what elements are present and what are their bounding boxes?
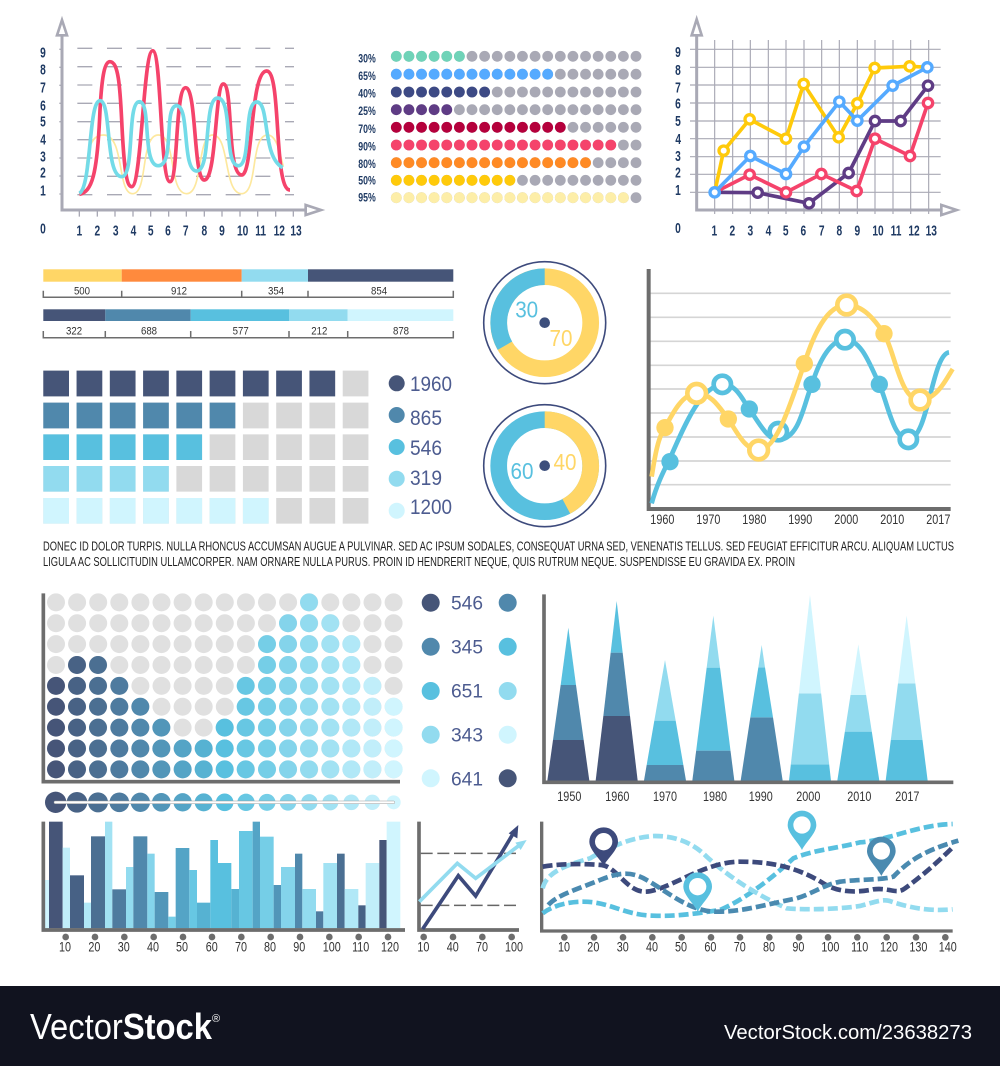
x axis labels: 70: [235, 939, 247, 955]
chart: stacked bar two: 878: [393, 325, 409, 338]
icon: cyan pin high: [788, 811, 816, 850]
chart: percentage dot rows: [358, 53, 636, 205]
legend: waffle grid: 865: [410, 407, 442, 430]
x axis labels: 60: [206, 939, 218, 955]
y axis labels: 8: [675, 61, 681, 79]
text block: paragraph: [43, 539, 954, 569]
y axis labels: [40, 43, 47, 237]
y axis labels: 4: [675, 130, 682, 148]
x axis labels: 3: [113, 221, 119, 239]
y axis labels: 5: [675, 112, 681, 130]
footer reference: VectorStock.com/23638273: [724, 1022, 972, 1044]
x axis labels: 6: [165, 221, 171, 239]
year labels: [557, 789, 920, 804]
blue series: [652, 331, 949, 503]
triangle 1960: [596, 601, 638, 781]
triangle 2000: [789, 595, 831, 781]
x axis labels: 4: [766, 221, 772, 239]
y axis labels: 1: [40, 181, 46, 199]
chart: trend arrows: [417, 822, 527, 955]
y axis labels: 0: [40, 219, 46, 237]
chart: stacked bar two: [43, 309, 453, 338]
chart: wave line chart: [40, 20, 321, 239]
percentage labels: 50%: [358, 175, 376, 188]
chart: stacked bar one: [43, 269, 453, 298]
triangle 1980: [692, 616, 734, 781]
x axis labels: 120: [880, 939, 898, 955]
donut chart: 30 / 70: 30: [515, 296, 538, 322]
dot rows: [396, 56, 636, 198]
legend: dot matrix: 641: [451, 770, 483, 790]
y axis labels: 7: [675, 78, 681, 96]
x axis labels: 80: [264, 939, 276, 955]
chart: stacked bar two: 212: [311, 325, 327, 338]
icon: teal pin: [867, 837, 896, 876]
x axis labels: 90: [792, 939, 805, 955]
percentage labels: 65%: [358, 71, 376, 83]
triangle 1990: [741, 645, 783, 781]
percentage labels: 80%: [358, 159, 376, 171]
x axis labels: 100: [505, 939, 523, 955]
x axis labels: 2: [729, 221, 735, 239]
icon: navy pin: [589, 827, 618, 866]
bubble slider row: [45, 792, 401, 813]
x axis labels: 5: [783, 221, 789, 239]
x axis labels: 10: [872, 221, 884, 239]
x axis labels: 110: [851, 939, 869, 955]
x axis labels: 12: [274, 221, 285, 239]
x axis labels: 40: [147, 939, 159, 955]
legend: waffle grid: 546: [410, 437, 442, 460]
arrow: light blue trend: [419, 840, 527, 902]
x axis labels: 13: [290, 221, 302, 239]
x axis labels: 1: [76, 221, 82, 239]
y axis labels: 9: [40, 43, 46, 61]
percentage labels: 70%: [358, 124, 376, 136]
y axis labels: 1: [675, 181, 681, 199]
x axis labels: 60: [704, 939, 717, 955]
year labels: 2000: [796, 789, 821, 804]
x axis labels: 9: [219, 221, 225, 239]
chart: stacked bar two: 322: [66, 325, 82, 338]
x axis labels: 4: [131, 221, 137, 239]
x axis labels: 20: [88, 939, 101, 955]
y axis labels: 8: [40, 60, 46, 78]
donut chart: 60 / 40: [484, 405, 606, 527]
chart: stacked bar one: 854: [371, 285, 387, 298]
x axis labels: 6: [800, 221, 806, 239]
legend: dot matrix: 546: [451, 594, 483, 614]
x axis labels: 1980: [742, 512, 767, 527]
x axis labels: [59, 939, 399, 955]
x axis labels: 10: [558, 939, 570, 955]
x axis labels: 20: [587, 939, 600, 955]
legend: dot matrix: 345: [451, 638, 483, 658]
chart: dot matrix area: [43, 593, 400, 782]
y axis labels: 5: [40, 112, 46, 130]
legend: waffle grid: 1960: [410, 373, 452, 396]
y axis labels: 7: [40, 78, 46, 96]
chart: stacked bar one: 912: [171, 285, 187, 298]
legend: dot matrix: [422, 594, 517, 790]
percentage labels: 40%: [358, 88, 376, 101]
purple series: [715, 81, 933, 208]
chart: grid line chart with markers: [675, 19, 957, 239]
x axis labels: 100: [323, 939, 341, 955]
icon: cyan pin low: [683, 872, 712, 912]
x axis labels: 7: [183, 221, 189, 239]
chart: stacked bar two: 688: [141, 325, 157, 338]
x axis labels: 1: [711, 221, 717, 239]
x axis labels: 100: [821, 939, 840, 955]
chart: stacked bar one: 500: [74, 285, 90, 298]
x axis labels: 3: [747, 221, 753, 239]
donut chart: 60 / 40: 40: [554, 449, 576, 475]
x axis labels: 2000: [834, 512, 859, 527]
donut chart: 30 / 70: 70: [550, 325, 572, 351]
x axis labels: 1990: [788, 512, 813, 527]
x axis labels: 90: [293, 939, 306, 955]
donut chart: 60 / 40: 60: [510, 458, 534, 484]
chart: triangle bars: [544, 594, 953, 804]
x axis labels: 13: [926, 221, 937, 239]
y axis labels: 4: [40, 130, 47, 148]
x axis labels: 2017: [926, 512, 951, 527]
legend: waffle grid: [389, 373, 452, 519]
x axis labels: 40: [447, 939, 459, 955]
x axis labels: 8: [201, 221, 207, 239]
year labels: 2017: [895, 789, 920, 804]
percentage labels: [358, 53, 376, 205]
yellow series: [715, 62, 929, 192]
x axis labels: 10: [237, 221, 248, 239]
triangle 2017: [886, 616, 928, 781]
x axis labels: 11: [891, 221, 901, 239]
y axis labels: 0: [675, 219, 681, 237]
registered mark: ®: [212, 1013, 220, 1025]
year labels: 1990: [749, 789, 773, 804]
x axis labels: 120: [381, 939, 399, 955]
x axis labels: [76, 221, 302, 239]
x axis labels: 11: [255, 221, 266, 239]
x axis labels: [650, 512, 951, 527]
year labels: 1960: [605, 789, 630, 804]
x axis labels: 50: [675, 939, 687, 955]
year labels: 2010: [847, 789, 872, 804]
yellow series: [652, 296, 953, 477]
donut chart: 30 / 70: [484, 262, 606, 384]
x axis labels: 140: [939, 939, 957, 955]
blue series: [710, 63, 932, 197]
x axis labels: 1960: [650, 512, 675, 527]
x axis labels: 110: [352, 939, 370, 955]
x axis labels: 40: [646, 939, 658, 955]
x axis labels: 70: [734, 939, 746, 955]
year labels: 1980: [703, 789, 727, 804]
x axis labels: 1970: [696, 512, 721, 527]
x axis labels: [711, 221, 937, 239]
pink series: [715, 98, 933, 197]
chart: smooth line chart 1960 to 2017: [649, 269, 953, 527]
legend: waffle grid: 1200: [410, 496, 452, 519]
chart: column bars: [43, 822, 405, 955]
y axis labels: 6: [675, 94, 681, 112]
x axis labels: 130: [909, 939, 928, 955]
y axis labels: [675, 43, 682, 237]
x axis labels: [558, 939, 957, 955]
x axis labels: [417, 939, 523, 955]
x axis labels: 10: [59, 939, 71, 955]
legend: waffle grid: 319: [410, 467, 442, 490]
x axis labels: 30: [118, 939, 130, 955]
x axis labels: 7: [819, 221, 825, 239]
y axis labels: 6: [40, 96, 46, 114]
footer band: [0, 986, 1000, 1066]
y axis labels: 2: [40, 163, 46, 181]
x axis labels: 12: [908, 221, 920, 239]
x axis labels: 10: [417, 939, 430, 955]
chart: stacked bar two: 577: [233, 325, 249, 338]
x axis labels: 80: [763, 939, 775, 955]
percentage labels: 30%: [358, 53, 376, 66]
y axis labels: 3: [675, 147, 681, 165]
x axis labels: 70: [476, 939, 488, 955]
x axis labels: 2010: [880, 512, 905, 527]
y axis labels: 2: [675, 163, 681, 181]
chart: stacked bar one: 354: [268, 285, 284, 298]
triangle 2010: [837, 644, 879, 781]
chart: dashed route lines with pins: [542, 811, 958, 955]
x axis labels: 50: [176, 939, 188, 955]
percentage labels: 25%: [358, 106, 376, 118]
percentage labels: 90%: [358, 142, 376, 154]
triangle 1970: [644, 660, 686, 781]
y axis labels: 3: [40, 147, 46, 165]
legend: dot matrix: 343: [451, 726, 483, 746]
x axis labels: 5: [148, 221, 154, 239]
chart: square waffle grid: [43, 384, 369, 511]
x axis labels: 8: [836, 221, 842, 239]
y axis labels: 9: [675, 43, 681, 61]
footer logo: VectorStock: [30, 1006, 213, 1047]
legend: dot matrix: 651: [451, 682, 483, 702]
x axis labels: 30: [617, 939, 629, 955]
triangle 1950: [547, 628, 589, 781]
arrow: navy trend: [423, 825, 518, 929]
year labels: 1970: [653, 789, 677, 804]
percentage labels: 95%: [358, 193, 376, 205]
x axis labels: 2: [94, 221, 100, 239]
x axis labels: 9: [854, 221, 860, 239]
year labels: 1950: [557, 789, 582, 804]
